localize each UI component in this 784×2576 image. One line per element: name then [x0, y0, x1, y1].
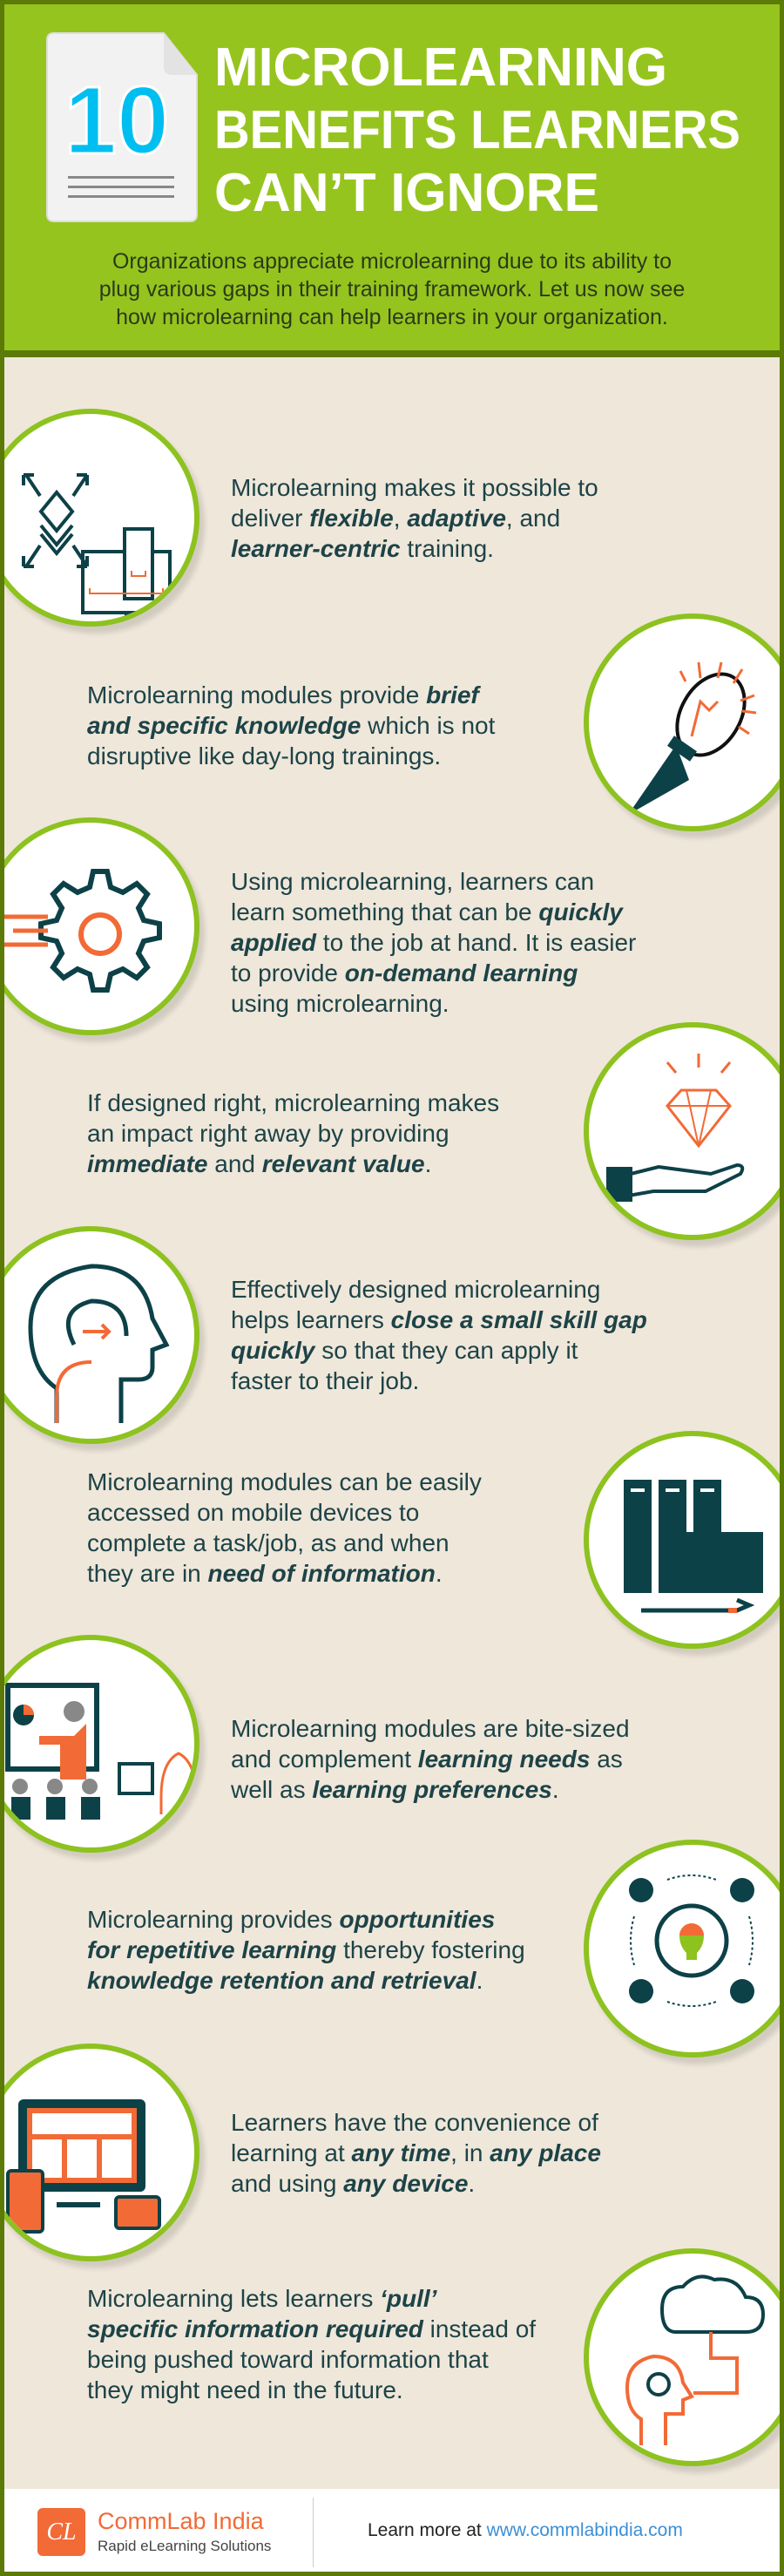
- item 6 text: complete a task/job, as and when: [87, 1529, 449, 1556]
- item 7 text: Microlearning modules are bite-sized: [231, 1715, 630, 1742]
- item 3 text: learn something that can be quickly: [231, 898, 623, 925]
- item 6 icon: [584, 1431, 784, 1649]
- item 6 text: Microlearning modules can be easily: [87, 1468, 482, 1495]
- header: [0, 0, 784, 357]
- item 2 text: and specific knowledge which is not: [87, 712, 495, 739]
- item 1 text: learner-centric training.: [231, 535, 494, 562]
- item 10 text: [87, 2285, 537, 2403]
- item 1 text: Microlearning makes it possible to: [231, 474, 598, 501]
- item 5 icon: [0, 1226, 199, 1444]
- intro text: plug various gaps in their training framework. Let us now see: [99, 277, 685, 302]
- item 3 text: Using microlearning, learners can: [231, 868, 594, 895]
- item 10 text: Microlearning lets learners ‘pull’: [87, 2285, 436, 2312]
- item 3 text: [231, 868, 636, 1017]
- item 6 text: [87, 1468, 482, 1587]
- item 4 text: an impact right away by providing: [87, 1120, 449, 1147]
- item 8 text: Microlearning provides opportunities: [87, 1906, 495, 1933]
- item 5 text: Effectively designed microlearning: [231, 1276, 600, 1303]
- title: [214, 42, 740, 216]
- item 8 text: knowledge retention and retrieval.: [87, 1967, 483, 1994]
- item 10 text: being pushed toward information that: [87, 2346, 489, 2373]
- icon: document with 10: 10: [64, 67, 169, 174]
- footer: Rapid eLearning Solutions: [98, 2538, 271, 2554]
- item 7 icon: [0, 1635, 199, 1853]
- item 7 text: [231, 1715, 630, 1803]
- item 9 text: [231, 2109, 601, 2197]
- item 1 icon: [0, 409, 199, 627]
- item 9 icon: [0, 2044, 199, 2261]
- item 2 text: Microlearning modules provide brief: [87, 681, 479, 708]
- item 9 text: and using any device.: [231, 2170, 475, 2197]
- item 3 text: applied to the job at hand. It is easier: [231, 929, 636, 956]
- item 6 text: accessed on mobile devices to: [87, 1499, 419, 1526]
- item 8 text: for repetitive learning thereby fostering: [87, 1936, 525, 1963]
- item 5 text: [231, 1276, 647, 1394]
- item 8 text: [87, 1906, 525, 1994]
- item 2 text: disruptive like day-long trainings.: [87, 742, 441, 769]
- intro text: [99, 249, 685, 329]
- item 7 text: and complement learning needs as: [231, 1746, 623, 1773]
- item 6 text: they are in need of information.: [87, 1560, 443, 1587]
- logo: [37, 2508, 85, 2556]
- item 5 text: quickly so that they can apply it: [231, 1337, 578, 1364]
- item 5 text: helps learners close a small skill gap: [231, 1306, 647, 1333]
- item 8 icon: [584, 1840, 784, 2057]
- item 7 text: well as learning preferences.: [231, 1776, 559, 1803]
- item 1 text: [231, 474, 598, 562]
- item 9 text: learning at any time, in any place: [231, 2139, 601, 2166]
- item 3 text: using microlearning.: [231, 990, 449, 1017]
- item 4 text: If designed right, microlearning makes: [87, 1089, 499, 1116]
- brand text: CommLab India: [98, 2508, 264, 2534]
- item 10 icon: [584, 2248, 784, 2466]
- footer: [0, 2489, 784, 2576]
- item 2 text: [87, 681, 495, 769]
- learn more link: Learn more at www.commlabindia.com: [368, 2520, 683, 2540]
- item 3 text: to provide on-demand learning: [231, 959, 578, 986]
- item 5 text: faster to their job.: [231, 1367, 419, 1394]
- item 10 text: they might need in the future.: [87, 2376, 403, 2403]
- item 9 text: Learners have the convenience of: [231, 2109, 598, 2136]
- item 4 text: [87, 1089, 499, 1177]
- logo: CL: [46, 2518, 77, 2545]
- intro text: Organizations appreciate microlearning due to its ability to: [112, 249, 672, 274]
- item 2 icon: [584, 613, 784, 831]
- icon: document with 10: [46, 32, 198, 222]
- item 1 text: deliver flexible, adaptive, and: [231, 505, 560, 532]
- item 10 text: specific information required instead of: [87, 2315, 536, 2342]
- intro text: how microlearning can help learners in your organization.: [116, 305, 668, 329]
- item 4 text: immediate and relevant value.: [87, 1150, 431, 1177]
- item 4 icon: [584, 1022, 784, 1240]
- item 3 icon: [0, 817, 199, 1035]
